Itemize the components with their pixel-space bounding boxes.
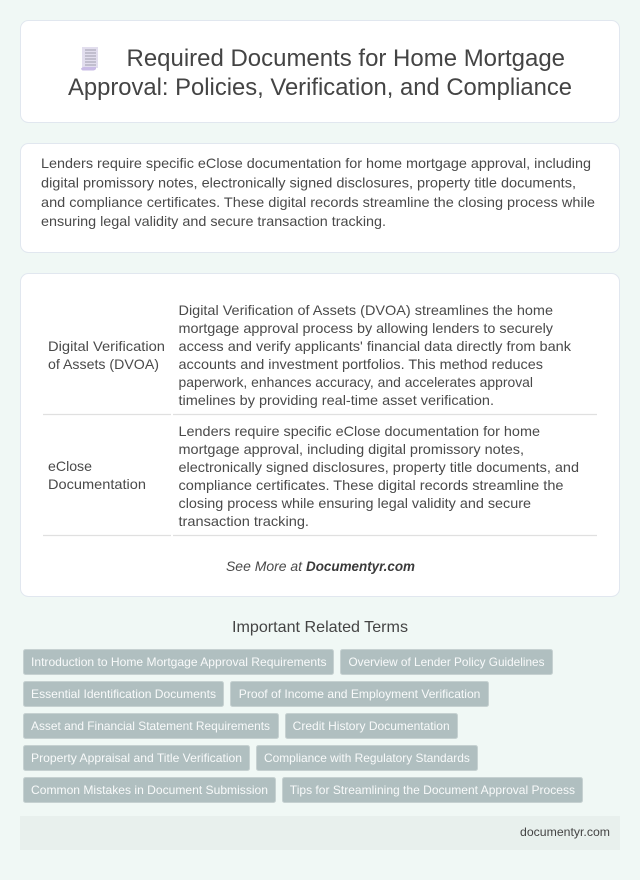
panel: summary description	[20, 144, 620, 252]
tag: Introduction to Home Mortgage Approval Requirements	[31, 655, 326, 669]
tag: Common Mistakes in Document Submission	[31, 783, 268, 797]
tag	[24, 714, 278, 738]
tag	[282, 778, 582, 802]
tag: Essential Identification Documents	[31, 687, 216, 701]
tag	[24, 650, 334, 674]
row label: Digital Verification of Assets	[48, 338, 165, 372]
row text: eClose Documentation: compliance certificates. These digital records streamline the	[178, 477, 564, 493]
tag	[340, 650, 552, 674]
see more link: See More at	[226, 558, 303, 574]
related term tags	[24, 650, 582, 802]
tag: Proof of Income and Employment Verification	[239, 687, 480, 701]
row text: Digital Verification of Assets: mortgage approval process by allowing lenders to securely	[178, 320, 553, 336]
tag: Credit History Documentation	[293, 719, 450, 733]
tag: Compliance with Regulatory Standards	[264, 751, 470, 765]
tag	[256, 746, 478, 770]
row label: eClose Documentation	[48, 458, 146, 492]
title: Required Documents for Home Mortgage	[126, 45, 565, 72]
row text: eClose Documentation: Lenders require specific eClose documentation for home	[178, 423, 540, 439]
tag	[230, 682, 488, 706]
footer: documentyr.com	[520, 825, 610, 839]
header panel	[20, 20, 620, 122]
row text: Digital Verification of Assets: Digital Verification of Assets (DVOA) streamlines the home	[178, 302, 553, 318]
tag: Asset and Financial Statement Requirements	[31, 719, 270, 733]
summary text	[41, 155, 595, 229]
row text: eClose Documentation: electronically signed disclosures, property title documents, and	[178, 459, 579, 475]
row text: eClose Documentation: closing process while ensuring legal validity and secure	[178, 495, 531, 511]
row text: Digital Verification of Assets: paperwork, enhances accuracy, and accelerates approval	[178, 374, 533, 390]
tag	[286, 714, 458, 738]
summary text: and compliance certificates. These digital records streamline the closing process while	[41, 194, 595, 210]
footer	[20, 816, 620, 850]
tag	[24, 778, 276, 802]
see more link	[226, 558, 415, 574]
tag	[24, 682, 224, 706]
icon: document scroll	[81, 47, 98, 70]
see more link: Documentyr.com	[306, 558, 415, 574]
tag: Property Appraisal and Title Verification	[31, 751, 242, 765]
row label: eClose Documentation: eClose	[48, 458, 92, 474]
tag	[24, 746, 250, 770]
title: Approval: Policies, Verification, and Compliance	[68, 74, 572, 101]
row label: eClose Documentation: Documentation	[48, 476, 146, 492]
row text: Digital Verification of Assets: accounts and investment portfolios. This method reduces	[178, 356, 543, 372]
row text: eClose Documentation	[178, 423, 579, 529]
tag: Tips for Streamlining the Document Approval Process	[290, 783, 575, 797]
row text: eClose Documentation: mortgage approval, including digital promissory notes,	[178, 441, 524, 457]
row text: Digital Verification of Assets: access and verify applicants' financial data directly from bank	[178, 338, 572, 354]
panel: terms table	[20, 274, 620, 596]
row text: eClose Documentation: transaction tracking.	[178, 513, 309, 529]
heading: important related terms: Important Related Terms	[232, 619, 408, 636]
summary text: ensuring legal validity and secure transaction tracking.	[41, 213, 386, 229]
tag: Overview of Lender Policy Guidelines	[348, 655, 544, 669]
summary text: Lenders require specific eClose documentation for home mortgage approval, including	[41, 155, 591, 171]
row label: Digital Verification of Assets: of Assets (DVOA)	[48, 356, 159, 372]
row text: Digital Verification of Assets: timelines by providing real-time asset verification.	[178, 392, 494, 408]
summary text: digital promissory notes, electronically signed disclosures, property title documents,	[41, 174, 576, 190]
row text: Digital Verification of Assets	[178, 302, 572, 408]
row label: Digital Verification of Assets: Digital Verification	[48, 338, 165, 354]
title	[68, 45, 572, 101]
